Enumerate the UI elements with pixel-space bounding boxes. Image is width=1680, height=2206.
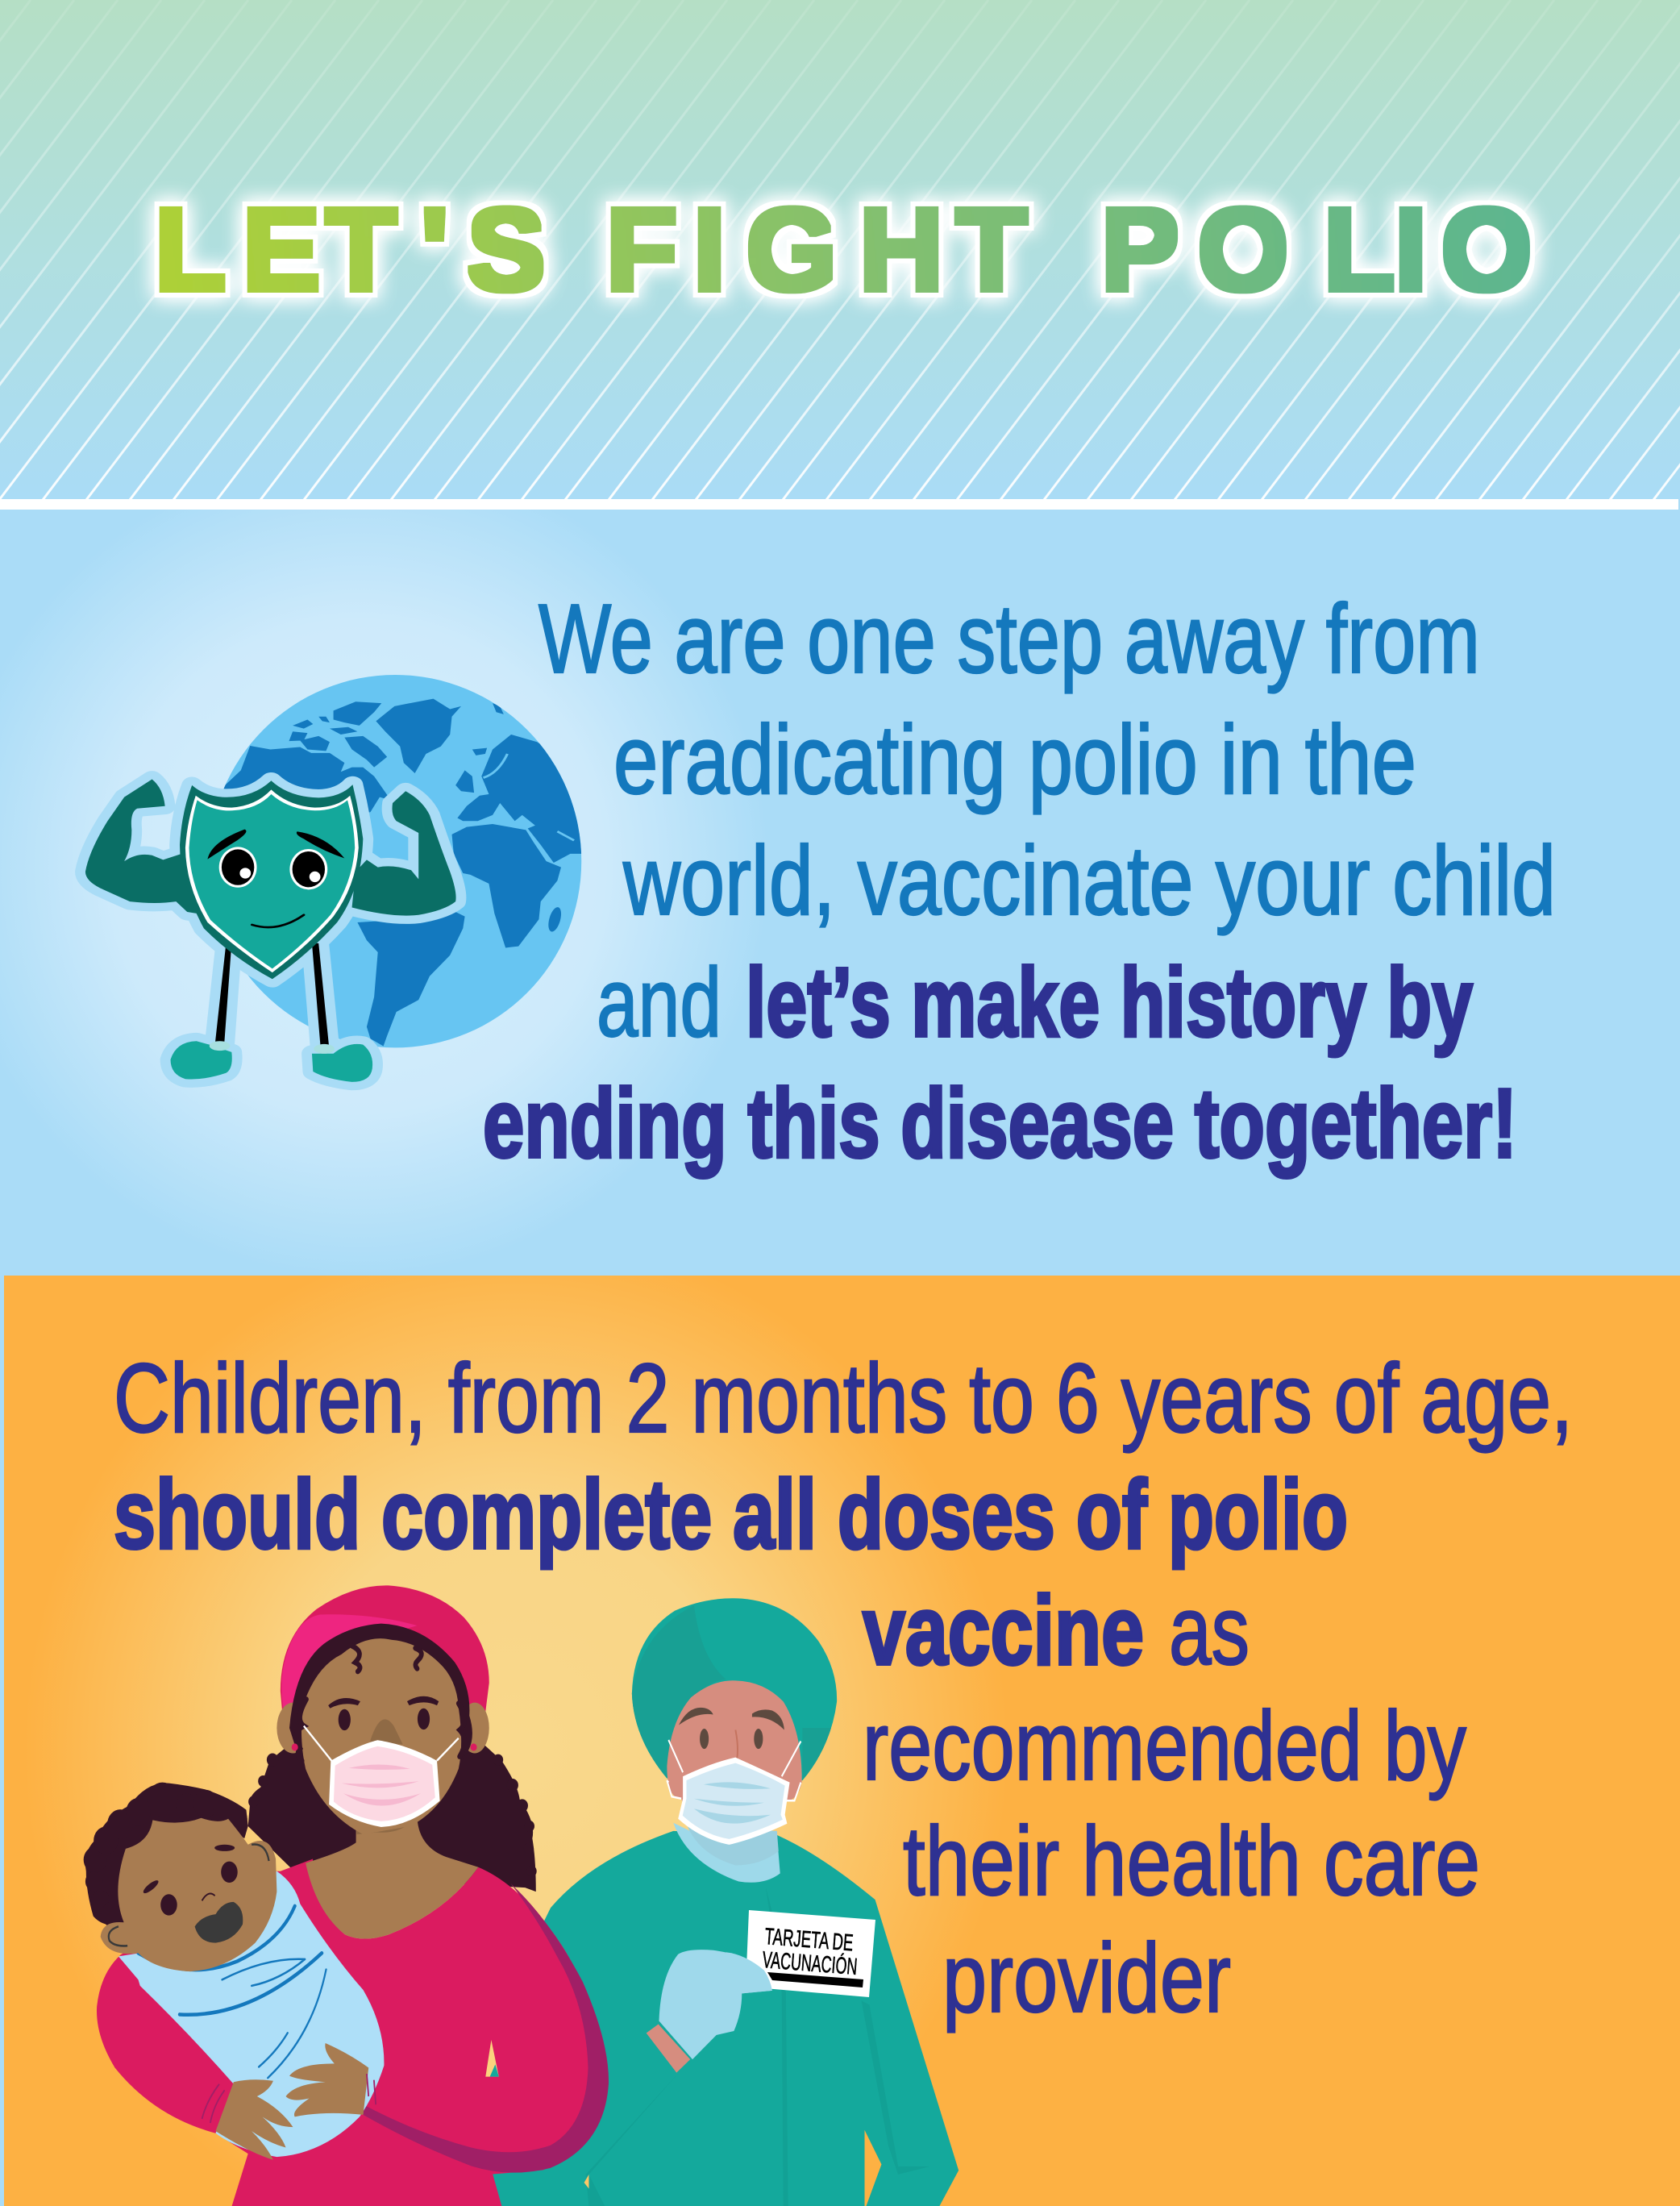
text block: polio eradication message (483, 584, 1556, 1178)
vaccination card: VACUNACIÓN (761, 1946, 859, 1980)
hair curls (297, 1646, 464, 1761)
text block: children vaccination heading: provider (942, 1923, 1231, 2033)
body (97, 1859, 608, 2206)
text block: children vaccination heading: as (1169, 1575, 1250, 1685)
vaccination card: TARJETA DE (763, 1924, 855, 1956)
shoes (171, 1041, 372, 1082)
panel: title banner (0, 0, 1680, 500)
icon: shield mascot (85, 779, 456, 1082)
text block: children vaccination heading: should complete all doses of polio (114, 1459, 1348, 1569)
glove and wrist (647, 2024, 690, 2073)
cap (632, 1598, 837, 1780)
text block: children vaccination heading: their health care (903, 1806, 1480, 1916)
mask (667, 1740, 800, 1800)
text block: polio eradication message: and (597, 947, 721, 1057)
text block: polio eradication message: eradicating polio in the (613, 705, 1416, 814)
title: LET'S FIGHT POLIO (155, 185, 1532, 314)
illustration: health worker (477, 1598, 959, 2206)
baby hair (84, 1783, 248, 1927)
legs (215, 943, 329, 1047)
text block: children vaccination heading: vaccine (863, 1575, 1144, 1685)
baby head (101, 1818, 277, 1971)
white divider band (0, 499, 1678, 510)
hair back (248, 1736, 537, 1892)
arms (85, 779, 456, 916)
face (219, 847, 257, 888)
ears (277, 1703, 310, 1754)
pink mask (304, 1726, 459, 1761)
shield body (180, 780, 363, 979)
icon: globe (224, 675, 582, 1048)
illustration: mother and baby (84, 1585, 609, 2206)
hands (215, 2079, 293, 2160)
text block: children vaccination heading: recommended by (863, 1691, 1466, 1800)
headband (281, 1585, 489, 1712)
baby blanket (119, 1871, 384, 2157)
gown (477, 1831, 959, 2206)
mascot halo (85, 779, 456, 1082)
vaccination card (726, 1910, 875, 1997)
face (301, 1638, 461, 1834)
neck and chest (306, 1818, 478, 1939)
collar (673, 1823, 780, 1883)
text block: children vaccination heading (114, 1343, 1573, 2033)
panel: orange vaccination section (4, 1276, 1680, 2206)
face (667, 1680, 802, 1827)
baby face (221, 1862, 238, 1883)
panel: blue message (0, 510, 1680, 2206)
sleeve shading (364, 1883, 609, 2173)
hair front (289, 1624, 472, 1761)
